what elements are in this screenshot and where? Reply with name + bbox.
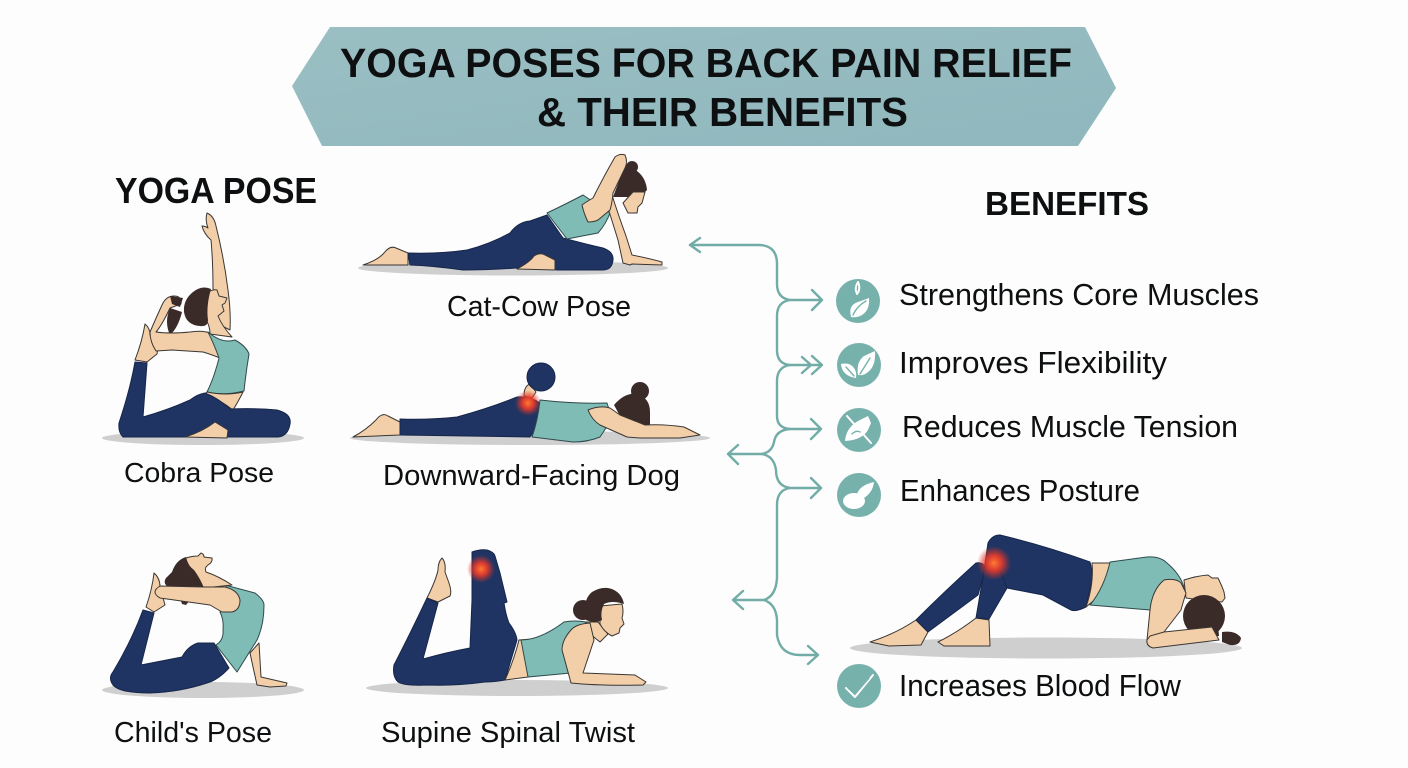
panel: cobra pose	[102, 213, 304, 445]
title banner: & THEIR BENEFITS	[537, 89, 908, 135]
heading: benefits: BENEFITS	[985, 185, 1149, 222]
label: supine spinal twist: Supine Spinal Twist	[381, 717, 635, 749]
heading: yoga pose: YOGA POSE	[115, 170, 317, 211]
icon: leaf and stone	[837, 473, 881, 517]
benefit: enhances posture	[837, 473, 1140, 517]
connector arrows	[690, 238, 822, 664]
icon: crossed-out muscle	[837, 408, 881, 452]
benefit: increases blood flow: Increases Blood Flow	[899, 668, 1182, 703]
label: cobra pose: Cobra Pose	[124, 457, 274, 488]
benefit: strengthens core muscles	[836, 277, 1259, 323]
label: cat-cow pose: Cat-Cow Pose	[447, 291, 631, 323]
label: downward-facing dog: Downward-Facing Dog	[383, 460, 680, 492]
icon: flame and leaf	[836, 279, 880, 323]
panel: bridge pose illustration	[850, 535, 1242, 658]
title banner	[292, 27, 1116, 146]
benefit: reduces muscle tension: Reduces Muscle Tension	[902, 409, 1238, 444]
benefit: improves flexibility	[837, 343, 1168, 387]
panel: supine spinal twist	[366, 550, 668, 696]
icon: leaves	[837, 343, 881, 387]
benefit: improves flexibility: Improves Flexibility	[899, 345, 1168, 380]
benefit: strengthens core muscles: Strengthens Core Muscles	[899, 277, 1259, 312]
benefit: enhances posture: Enhances Posture	[900, 473, 1140, 508]
panel: downward-facing dog	[350, 363, 710, 445]
benefit: increases blood flow	[837, 664, 1182, 708]
icon: check mark	[837, 664, 881, 708]
panel: child's pose	[102, 553, 304, 698]
label: child's pose: Child's Pose	[114, 717, 272, 749]
title banner: YOGA POSES FOR BACK PAIN RELIEF	[340, 40, 1072, 86]
panel: cat-cow pose	[358, 154, 668, 276]
benefit: reduces muscle tension	[837, 408, 1238, 452]
